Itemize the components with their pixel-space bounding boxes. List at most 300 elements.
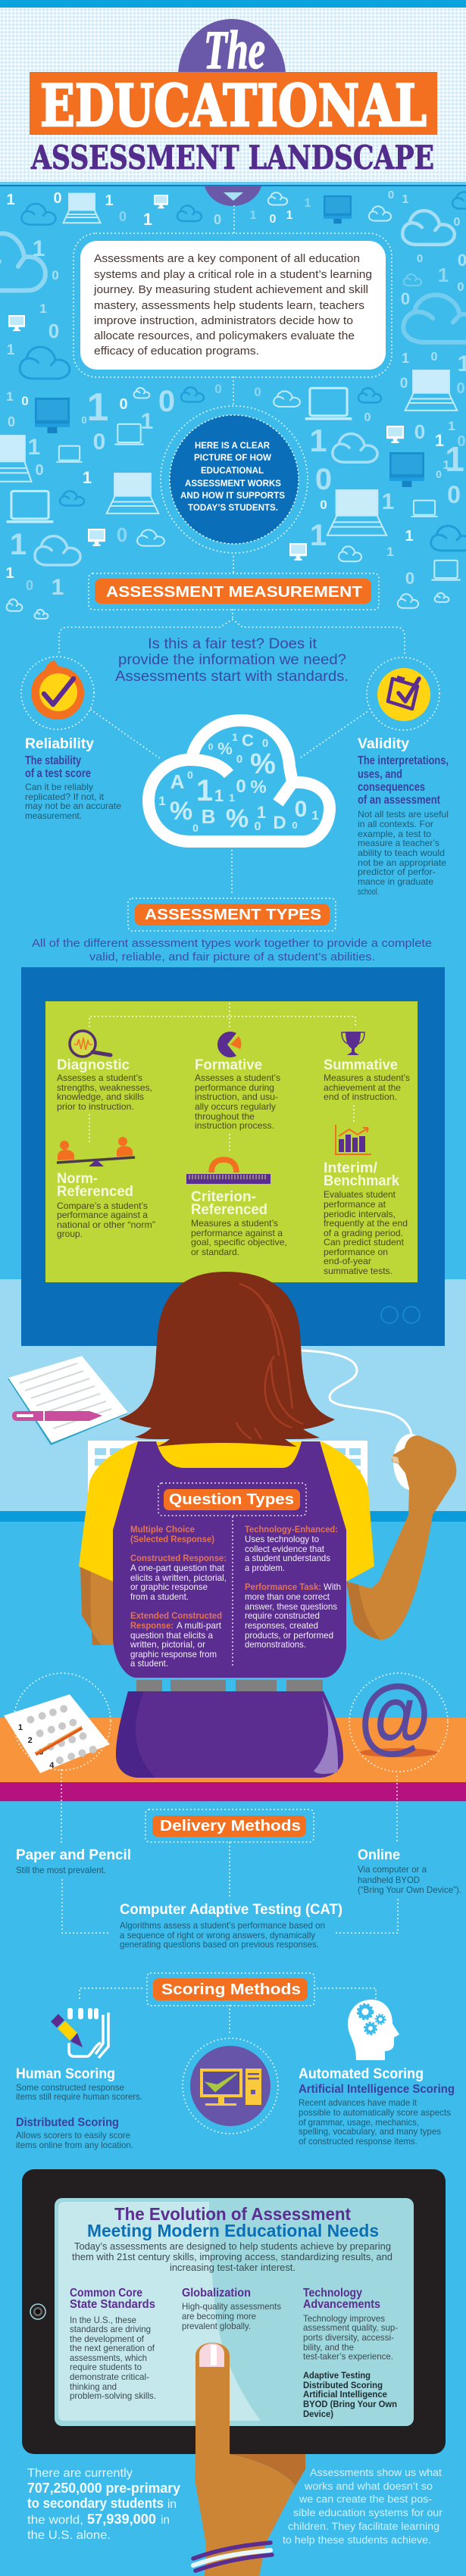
tablet title: Meeting Modern Educational Needs — [87, 2221, 379, 2240]
question types: left column: A one-part question that — [130, 1563, 225, 1573]
text: norm-referenced: performance against a — [57, 1210, 148, 1220]
question types: left column — [130, 1524, 227, 1669]
text: automated scoring: possible to automatically score aspects — [299, 2107, 451, 2118]
heading: question types — [158, 1483, 306, 1516]
icon: data cloud: 1 — [196, 774, 213, 807]
column: technology advancements: Technology improves — [303, 2313, 385, 2324]
heading: scoring methods — [147, 1973, 314, 2006]
icon: answer sheet: 4 — [49, 1761, 55, 1770]
question text: fair test: Assessments start with standards. — [115, 669, 349, 685]
text: validity — [358, 735, 449, 897]
icon: answer sheet: 1 — [18, 1723, 23, 1732]
text: computer adaptive testing: a sequence of right or wrong answers, dynamically — [120, 1930, 315, 1941]
icon: data cloud: 1 — [257, 803, 266, 822]
text: validity: Validity — [358, 735, 409, 752]
text: norm-referenced: group. — [57, 1229, 83, 1239]
callout circle: ASSESSMENT WORKS — [185, 479, 281, 489]
icon: data cloud: 0 — [292, 820, 298, 831]
text: reliability: measurement. — [25, 810, 82, 821]
intro text — [93, 252, 372, 358]
text: formative: Assesses a student’s — [195, 1073, 280, 1083]
heading: delivery methods — [145, 1809, 314, 1842]
background pattern of clouds, laptops and digits: 0 — [388, 189, 394, 201]
connector dots — [61, 1770, 398, 2036]
column: common core: the next generation of — [70, 2343, 155, 2353]
text: reliability: Can it be reliably — [25, 782, 93, 792]
icon: formative pie chart — [217, 1032, 241, 1057]
text: norm-referenced: national or other “norm” — [57, 1219, 155, 1230]
intro text: efficacy of education programs. — [94, 345, 259, 358]
question types: left column: Extended Constructed — [130, 1610, 222, 1621]
text: paper and pencil: Still the most prevalent. — [16, 1865, 106, 1875]
text: validity: measure a teacher’s — [358, 838, 439, 848]
callout circle: HERE IS A CLEAR — [195, 442, 271, 451]
question types: right column: With — [324, 1582, 341, 1592]
question types: left column: graphic response from — [130, 1649, 217, 1660]
question text: fair test: Is this a fair test? Does it — [148, 636, 317, 652]
background pattern of clouds, laptops and digits: 1 — [448, 419, 455, 433]
text: automated scoring: Recent advances have made it — [299, 2097, 418, 2108]
question types: left column: question that elicits a — [130, 1630, 213, 1641]
text: interim benchmark: Can predict student — [324, 1237, 405, 1247]
column: common core: In the U.S., these — [70, 2315, 136, 2325]
text: computer adaptive testing: Computer Adaptive Testing (CAT) — [120, 1901, 342, 1918]
text: computer adaptive testing — [120, 1901, 342, 1950]
pants — [116, 1691, 343, 1778]
text: summative: achievement at the — [324, 1082, 401, 1093]
background pattern of clouds, laptops and digits: 0 — [457, 433, 466, 450]
question types: right column: require constructed — [245, 1610, 320, 1621]
text: summative: Summative — [324, 1057, 398, 1073]
intro text: Assessments are a key component of all education — [94, 252, 360, 265]
text: online: Via computer or a — [358, 1864, 427, 1875]
background pattern of clouds, laptops and digits: 0 — [401, 289, 410, 308]
background pattern of clouds, laptops and digits: 1 — [438, 264, 449, 286]
panel: introduction — [73, 233, 392, 377]
text: paper and pencil — [16, 1847, 131, 1875]
text: formative: throughout the — [195, 1111, 255, 1122]
column: common core: assessments, which — [70, 2353, 147, 2363]
text: reliability: may not be an accurate — [25, 801, 121, 811]
background pattern of clouds, laptops and digits: 0 — [320, 498, 327, 512]
callout circle: AND HOW IT SUPPORTS — [180, 492, 285, 501]
icon: data cloud: B — [202, 805, 215, 828]
text: norm-referenced: Compare’s a student’s — [57, 1201, 148, 1211]
background pattern of clouds, laptops and digits: 1 — [250, 209, 257, 222]
question types: right column: more than one correct — [245, 1591, 330, 1602]
column: globalization: prevalent globally. — [182, 2321, 251, 2331]
heading: assessment types: ASSESSMENT TYPES — [145, 907, 321, 923]
tablet title — [87, 2204, 379, 2240]
text: online: (“Bring Your Own Device”). — [358, 1884, 461, 1895]
column: technology advancements: test-taker’s experience. — [303, 2351, 393, 2362]
background pattern of clouds, laptops and digits: 1 — [52, 575, 64, 600]
background pattern of clouds, laptops and digits: 0 — [119, 209, 127, 224]
closing text: we can create the best pos- — [299, 2493, 432, 2505]
text: online: handheld BYOD — [358, 1875, 420, 1885]
background pattern of clouds, laptops and digits: 1 — [83, 468, 92, 487]
text: validity: mance in graduate — [358, 876, 433, 887]
icon: human scoring — [55, 2008, 108, 2058]
text: computer adaptive testing: Algorithms assess a student’s performance based on — [120, 1920, 325, 1931]
heading: question types: Question Types — [169, 1491, 294, 1508]
header — [0, 0, 466, 206]
text: validity: predictor of perfor- — [358, 866, 436, 877]
background pattern of clouds, laptops and digits: 1 — [310, 519, 327, 552]
text: validity: example, a test to — [358, 829, 431, 839]
icon: automated scoring computer — [183, 2038, 278, 2134]
pen — [12, 1411, 102, 1421]
icon: reliability — [21, 657, 94, 729]
icon: data cloud: D — [273, 813, 286, 833]
closing text — [283, 2467, 443, 2546]
text: automated scoring: of grammar, usage, mechanics, — [299, 2117, 419, 2128]
background pattern of clouds, laptops and digits: 0 — [8, 414, 15, 429]
hand touching tablet — [193, 2343, 305, 2576]
text: interim benchmark: frequently at the end — [324, 1218, 408, 1229]
tablet intro: increasing test-taker interest. — [170, 2262, 296, 2273]
text: reliability: The stability — [25, 754, 81, 767]
icon: answer sheet — [4, 1673, 111, 1777]
text: criterion-referenced: performance against a — [191, 1228, 283, 1238]
icon: summative trophy — [342, 1032, 364, 1055]
tablet intro: Today’s assessments are designed to help students achieve by preparing — [74, 2241, 391, 2252]
closing text: works and what doesn’t so — [304, 2481, 433, 2492]
paper and pen on desk — [8, 1356, 128, 1445]
icon: data cloud: % — [170, 797, 192, 826]
text: criterion-referenced: Criterion- — [191, 1189, 256, 1205]
closing text: Assessments show us what — [310, 2467, 442, 2478]
question types: right column: responses, created — [245, 1620, 318, 1631]
callout circle: TODAY’S STUDENTS. — [188, 504, 278, 513]
background pattern of clouds, laptops and digits: 0 — [405, 569, 414, 588]
desk scene backgrounds — [0, 1279, 466, 1803]
pencil — [36, 1728, 82, 1754]
text: norm-referenced — [57, 1171, 155, 1239]
text: validity: not be an appropriate — [358, 857, 446, 868]
text: interim benchmark: summative tests. — [324, 1266, 393, 1276]
background pattern of clouds, laptops and digits: 1 — [405, 528, 414, 545]
background pattern of clouds, laptops and digits: 0 — [214, 212, 221, 227]
background pattern of clouds, laptops and digits: 0 — [81, 414, 87, 426]
text: diagnostic: knowledge, and skills — [57, 1091, 144, 1102]
text: criterion-referenced: Measures a student’s — [191, 1218, 278, 1229]
question types: left column: elicits a written, pictorial, — [130, 1572, 227, 1583]
text: criterion-referenced: or standard. — [191, 1247, 239, 1257]
icon: data cloud: 0 — [295, 797, 307, 822]
text: interim benchmark: performance at — [324, 1199, 386, 1210]
question types: right column: a problem. — [245, 1563, 285, 1573]
icon: data cloud: 1 — [229, 792, 235, 804]
heading: delivery methods: Delivery Methods — [160, 1818, 301, 1834]
icon: validity — [367, 657, 439, 730]
text: reliability — [25, 735, 121, 821]
question types: right column: Technology-Enhanced: — [245, 1524, 338, 1535]
background pattern of clouds, laptops and digits: 0 — [21, 394, 29, 408]
assessment types intro — [32, 937, 432, 963]
background pattern of clouds, laptops and digits: 0 — [417, 252, 423, 265]
text: formative: instruction, and usu- — [195, 1091, 278, 1102]
background pattern of clouds, laptops and digits: 0 — [52, 268, 59, 283]
icon: data cloud: 1 — [158, 794, 166, 808]
background pattern of clouds, laptops and digits: 0 — [119, 396, 128, 413]
text: diagnostic — [57, 1057, 152, 1112]
text: norm-referenced: Referenced — [57, 1184, 133, 1200]
background pattern of clouds, laptops and digits: 0 — [214, 382, 222, 396]
column: technology advancements: BYOD (Bring Your Own — [303, 2399, 397, 2409]
background pattern of clouds, laptops and digits: 1 — [309, 423, 327, 458]
stat text: students: in — [161, 2514, 170, 2527]
question types: right column: answer, these questions — [245, 1601, 337, 1612]
icon: data cloud: 1 — [232, 731, 238, 743]
background pattern of clouds, laptops and digits — [0, 189, 466, 619]
stat text: students: the U.S. alone. — [27, 2529, 111, 2542]
column: globalization: are becoming more — [182, 2311, 256, 2322]
background pattern of clouds, laptops and digits: 1 — [33, 236, 45, 261]
question types: right column: a student understands — [245, 1553, 330, 1563]
background pattern of clouds, laptops and digits: 1 — [286, 209, 293, 222]
keyboard — [88, 1441, 367, 1511]
text: formative: instruction process. — [195, 1120, 274, 1131]
column: technology advancements: Device) — [303, 2409, 333, 2419]
column: technology advancements: Adaptive Testing — [303, 2370, 371, 2381]
background pattern of clouds, laptops and digits: 0 — [315, 463, 332, 496]
background pattern of clouds, laptops and digits: 1 — [28, 435, 40, 460]
background pattern of clouds, laptops and digits: 1 — [5, 565, 14, 582]
icon: data cloud: 1 — [311, 808, 319, 823]
background pattern of clouds, laptops and digits: 1 — [6, 192, 15, 208]
icon: data cloud: C — [242, 731, 254, 750]
icon: diagnostic magnifier — [70, 1031, 111, 1057]
background pattern of clouds, laptops and digits: 0 — [436, 468, 442, 480]
assessment types intro: All of the different assessment types work together to provide a complete — [32, 937, 432, 950]
icon: data cloud: 0 — [236, 753, 242, 766]
text: automated scoring: Automated Scoring — [299, 2065, 424, 2082]
column: technology advancements: Artificial Intelligence — [303, 2389, 387, 2400]
text: human scoring: items still require human scorers. — [16, 2091, 142, 2102]
closing text: to help these students achieve. — [283, 2534, 431, 2546]
text: paper and pencil: Paper and Pencil — [16, 1847, 131, 1863]
text: interim benchmark: end-of-year — [324, 1256, 371, 1266]
background pattern of clouds, laptops and digits: 0 — [254, 385, 261, 399]
icon: head with gears — [348, 2000, 399, 2060]
hair — [119, 1272, 335, 1447]
background pattern of clouds, laptops and digits: 1 — [10, 528, 27, 561]
background pattern of clouds, laptops and digits: 1 — [386, 545, 394, 559]
background pattern of clouds, laptops and digits: 0 — [48, 320, 59, 342]
question types: right column: demonstrations. — [245, 1639, 306, 1650]
background pattern of clouds, laptops and digits: 1 — [443, 459, 450, 472]
icon: data cloud: % — [250, 777, 267, 798]
text: formative: Formative — [195, 1057, 262, 1073]
background pattern of clouds, laptops and digits: 1 — [7, 342, 15, 358]
text: human scoring: Allows scorers to easily score — [16, 2130, 130, 2140]
question types: right column — [245, 1524, 341, 1650]
tablet screen — [55, 2198, 414, 2426]
title word: The: The — [204, 20, 265, 80]
column: common core: thinking and — [70, 2381, 117, 2392]
text: human scoring: Some constructed response — [16, 2082, 124, 2093]
icon: at sign: @ — [358, 1667, 432, 1762]
tablet intro: them with 21st century skills, improving access, standardizing results, and — [72, 2252, 393, 2262]
question types: left column: (Selected Response) — [130, 1534, 214, 1544]
background pattern of clouds, laptops and digits: 0 — [364, 411, 371, 424]
background pattern of clouds, laptops and digits: 0 — [53, 190, 62, 207]
purple title tab — [178, 19, 286, 206]
question types: right column: Performance Task: — [245, 1582, 321, 1592]
column: common core — [70, 2287, 156, 2401]
background pattern of clouds, laptops and digits: 0 — [447, 481, 461, 508]
belt — [136, 1680, 323, 1691]
icon: data cloud: 0 — [208, 742, 214, 752]
tablet camera — [30, 2304, 45, 2319]
text: computer adaptive testing: generating questions based on previous responses. — [120, 1939, 319, 1950]
bracelets — [193, 2543, 272, 2571]
background pattern of clouds, laptops and digits: 0 — [431, 351, 438, 364]
text: formative: ally occurs regularly — [195, 1101, 276, 1112]
background pattern of clouds, laptops and digits: 1 — [143, 210, 152, 229]
icon: data cloud: 1 — [214, 786, 224, 805]
heading: assessment measurement: ASSESSMENT MEASUREMENT — [106, 584, 362, 601]
question types: left column: Response: — [130, 1620, 174, 1631]
monitor — [21, 967, 445, 1346]
background pattern of clouds, laptops and digits: 0 — [400, 376, 408, 392]
question text: fair test: provide the information we need? — [118, 652, 346, 668]
text: validity: consequences — [358, 781, 425, 794]
question types: left column: Multiple Choice — [130, 1524, 195, 1535]
icon: data cloud: % — [250, 748, 276, 780]
question types: right column: collect evidence that — [245, 1544, 325, 1554]
tablet panel — [22, 2169, 446, 2454]
vest — [113, 1441, 346, 1678]
stat text: students: 57,939,000 — [87, 2512, 156, 2527]
text: online — [358, 1847, 461, 1895]
callout circle — [161, 406, 308, 553]
text: automated scoring: Artificial Intelligence Scoring — [299, 2083, 455, 2096]
background pattern of clouds, laptops and digits: 1 — [87, 386, 108, 429]
text: norm-referenced: Norm- — [57, 1171, 98, 1187]
text: validity: Not all tests are useful — [358, 809, 449, 820]
column: technology advancements: bility, and the — [303, 2342, 354, 2353]
column: common core: standards are driving — [70, 2324, 151, 2334]
column: technology advancements: Distributed Scoring — [303, 2380, 383, 2390]
closing text: sible education systems for our — [293, 2507, 443, 2518]
column: technology advancements: assessment quality, sup- — [303, 2322, 398, 2333]
text: summative: Measures a student’s — [324, 1073, 410, 1083]
text: validity: in all contexts. For — [358, 819, 433, 829]
text: formative — [195, 1057, 280, 1131]
column: technology advancements — [303, 2287, 398, 2419]
text: validity: uses, and — [358, 768, 402, 781]
left arm — [80, 1566, 113, 1645]
text: automated scoring: spelling, vocabulary, and many types — [299, 2126, 441, 2137]
icon: data cloud: 0 — [262, 737, 268, 750]
text: validity: ability to teach would — [358, 848, 445, 858]
text: interim benchmark: periodic intervals, — [324, 1209, 396, 1219]
text: summative: end of instruction. — [324, 1091, 397, 1102]
right arm and hand — [346, 1435, 456, 1640]
tablet title: The Evolution of Assessment — [114, 2204, 351, 2224]
student figure — [79, 1272, 456, 1778]
stat text: students: the world, — [27, 2514, 83, 2527]
stat text: students: There are currently — [27, 2467, 133, 2480]
column: common core: the development of — [70, 2334, 145, 2344]
column: common core: State Standards — [70, 2298, 155, 2311]
text: human scoring — [16, 2065, 142, 2150]
monitor screen — [45, 1001, 418, 1282]
icon: data cloud: 0 — [255, 820, 261, 833]
text: diagnostic: strengths, weaknesses, — [57, 1082, 152, 1093]
stat text: students — [27, 2467, 180, 2542]
text: criterion-referenced: goal, specific objective, — [191, 1237, 287, 1247]
column: globalization: Globalization — [182, 2287, 251, 2300]
intro text: journey. By measuring student achievement and skill — [93, 283, 368, 296]
icon: interim chart — [336, 1125, 371, 1154]
column: common core: require students to — [70, 2362, 142, 2372]
background pattern of clouds, laptops and digits: 0 — [93, 429, 105, 454]
background pattern of clouds, laptops and digits: 1 — [402, 193, 409, 206]
heading: assessment types — [128, 898, 336, 931]
text: diagnostic: prior to instruction. — [57, 1101, 134, 1112]
background pattern of clouds, laptops and digits: 1 — [305, 197, 311, 210]
heading: assessment measurement — [89, 573, 379, 610]
background pattern of clouds, laptops and digits: 1 — [445, 439, 464, 479]
orange banner — [30, 72, 437, 135]
column: globalization: High-quality assessments — [182, 2301, 281, 2312]
question types: left column: written, pictorial, or — [130, 1639, 205, 1650]
connector dots — [59, 206, 405, 896]
question types: left column: from a student. — [130, 1591, 189, 1602]
text: interim benchmark: Evaluates student — [324, 1189, 396, 1200]
callout circle: PICTURE OF HOW — [194, 454, 271, 463]
text: reliability: replicated? If not, it — [25, 792, 105, 802]
column: common core: problem-solving skills. — [70, 2390, 156, 2401]
question types: left column: A multi-part — [177, 1620, 222, 1631]
background pattern of clouds, laptops and digits: 0 — [117, 523, 127, 546]
column: globalization — [182, 2287, 281, 2331]
assessment types intro: valid, reliable, and fair picture of a student’s abilities. — [89, 951, 375, 963]
text: interim benchmark — [324, 1160, 408, 1276]
text: validity: school. — [358, 886, 379, 897]
tablet intro — [72, 2241, 393, 2273]
question types: left column: Constructed Response: — [130, 1553, 227, 1563]
text: diagnostic: Diagnostic — [57, 1057, 130, 1073]
text: formative: performance during — [195, 1082, 274, 1093]
mouse cord — [302, 1350, 411, 1434]
text: human scoring: items online from any location. — [16, 2140, 133, 2150]
stat text: students: in — [167, 2498, 177, 2511]
text: interim benchmark: Benchmark — [324, 1173, 399, 1189]
question types: left column: a student. — [130, 1658, 168, 1669]
icon: data cloud — [149, 720, 330, 841]
question text: fair test — [115, 636, 349, 685]
closing text: children. They facilitate learning — [288, 2521, 439, 2532]
text: validity: of an assessment — [358, 794, 441, 807]
icon: data cloud: % — [217, 739, 233, 758]
mouse — [393, 1434, 428, 1490]
icon: data cloud: 0 — [187, 769, 193, 781]
icon: data cloud: 0 — [236, 776, 246, 797]
question types: right column: Uses technology to — [245, 1534, 319, 1544]
heading: scoring methods: Scoring Methods — [161, 1981, 301, 1998]
background pattern of clouds, laptops and digits: 1 — [382, 489, 394, 514]
intro text: systems and play a critical role in a student’s learning — [94, 268, 372, 281]
question types: right column: products, or performed — [245, 1630, 333, 1641]
column: common core: Common Core — [70, 2287, 142, 2300]
background pattern of clouds, laptops and digits: 1 — [435, 431, 444, 450]
icon: answer sheet: 3 — [39, 1747, 43, 1756]
text: online: Online — [358, 1847, 400, 1863]
